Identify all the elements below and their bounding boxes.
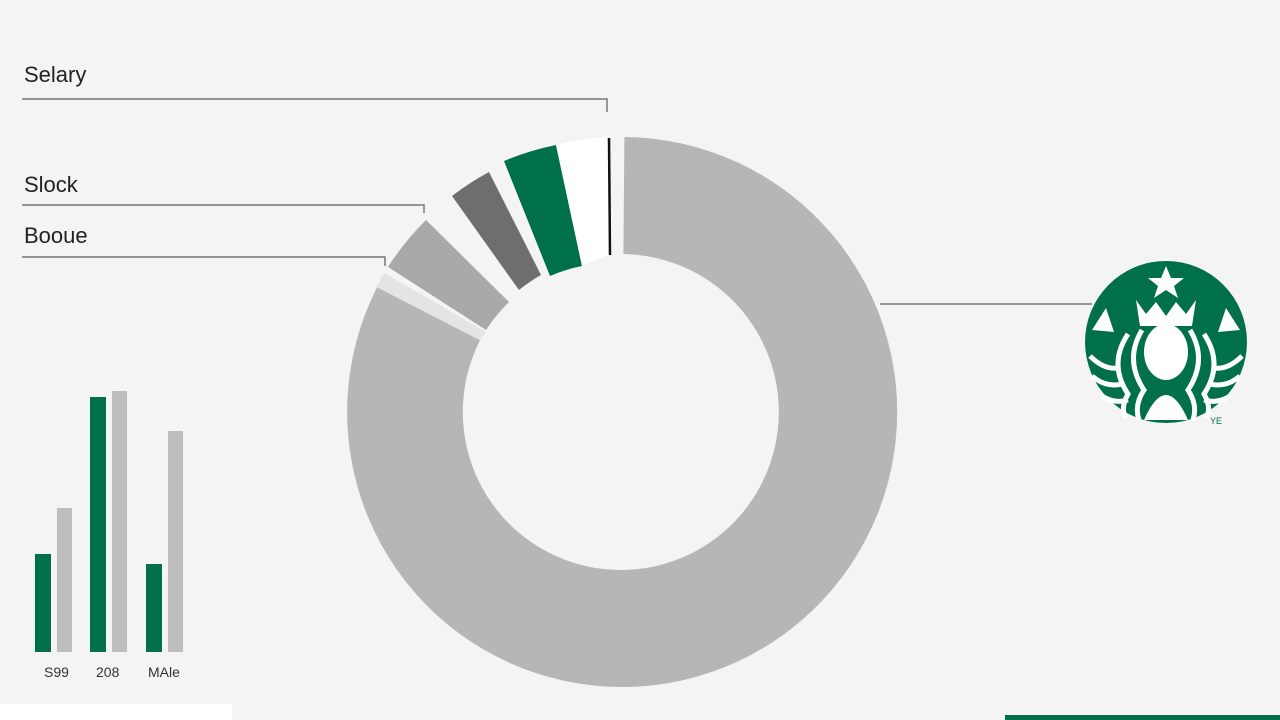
gray segment [388,220,509,330]
label: Salary: Selary [24,62,86,87]
dark gray segment [452,172,541,290]
bar chart [35,391,183,680]
bottom left white bar [0,704,232,720]
bottom right green bar [1005,715,1280,720]
main gray segment [347,137,897,687]
black thin line [609,138,610,255]
label: Stock: Slock [24,172,78,197]
label: Bonus: Booue [24,223,88,248]
bar labels: S99 [44,664,69,680]
white segment [556,137,612,266]
bar chart: MAle [148,664,180,680]
green segment [504,145,582,276]
bars [35,554,51,652]
leader lines [22,99,1092,304]
icon: Starbucks logo: YE [1210,416,1222,426]
bar chart: 208 [96,664,119,680]
light strip [377,273,486,340]
icon: Starbucks logo [1085,261,1247,426]
